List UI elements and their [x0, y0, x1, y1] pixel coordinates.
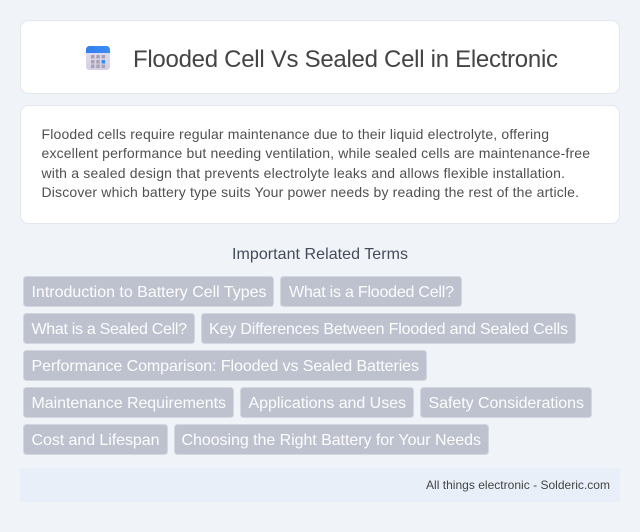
tag: Performance Comparison: Flooded vs Sealed Batteries [32, 358, 419, 375]
tag: What is a Sealed Cell? [32, 321, 187, 338]
tag [24, 388, 234, 418]
tag [24, 276, 274, 306]
tag [174, 424, 488, 454]
tag: Applications and Uses [248, 395, 406, 412]
panel: description [20, 106, 620, 224]
tag: Key Differences Between Flooded and Sealed Cells [209, 321, 568, 338]
tag: Choosing the Right Battery for Your Needs [182, 432, 481, 449]
text block: description: Flooded cells require regular maintenance due to their liquid electrolyte, offering [42, 126, 549, 142]
tag [240, 388, 414, 418]
tag: Maintenance Requirements [32, 395, 226, 412]
heading: related terms: Important Related Terms [232, 246, 408, 263]
tag: Introduction to Battery Cell Types [32, 284, 266, 301]
tag [280, 276, 462, 306]
tag [202, 314, 576, 344]
text block: description [40, 126, 590, 200]
tag [420, 388, 592, 418]
text block: description: Discover which battery type suits Your power needs by reading the rest of the article. [42, 184, 579, 200]
tag [24, 424, 168, 454]
footer [20, 468, 620, 502]
panel: term tags [24, 276, 592, 454]
tag: What is a Flooded Cell? [289, 284, 454, 301]
title: Flooded Cell Vs Sealed Cell in Electronic [133, 46, 558, 73]
text block: description: excellent performance but needing ventilation, while sealed cells are maintenance-free [42, 145, 590, 161]
panel: header [20, 20, 620, 94]
tag [24, 350, 426, 380]
tag: Safety Considerations [428, 395, 584, 412]
tag [24, 314, 194, 344]
icon: calendar [86, 46, 110, 70]
tag: Cost and Lifespan [32, 432, 160, 449]
text block: description: with a sealed design that prevents electrolyte leaks and allows flexible installation. [40, 165, 565, 181]
footer text: All things electronic - Solderic.com [426, 478, 610, 492]
